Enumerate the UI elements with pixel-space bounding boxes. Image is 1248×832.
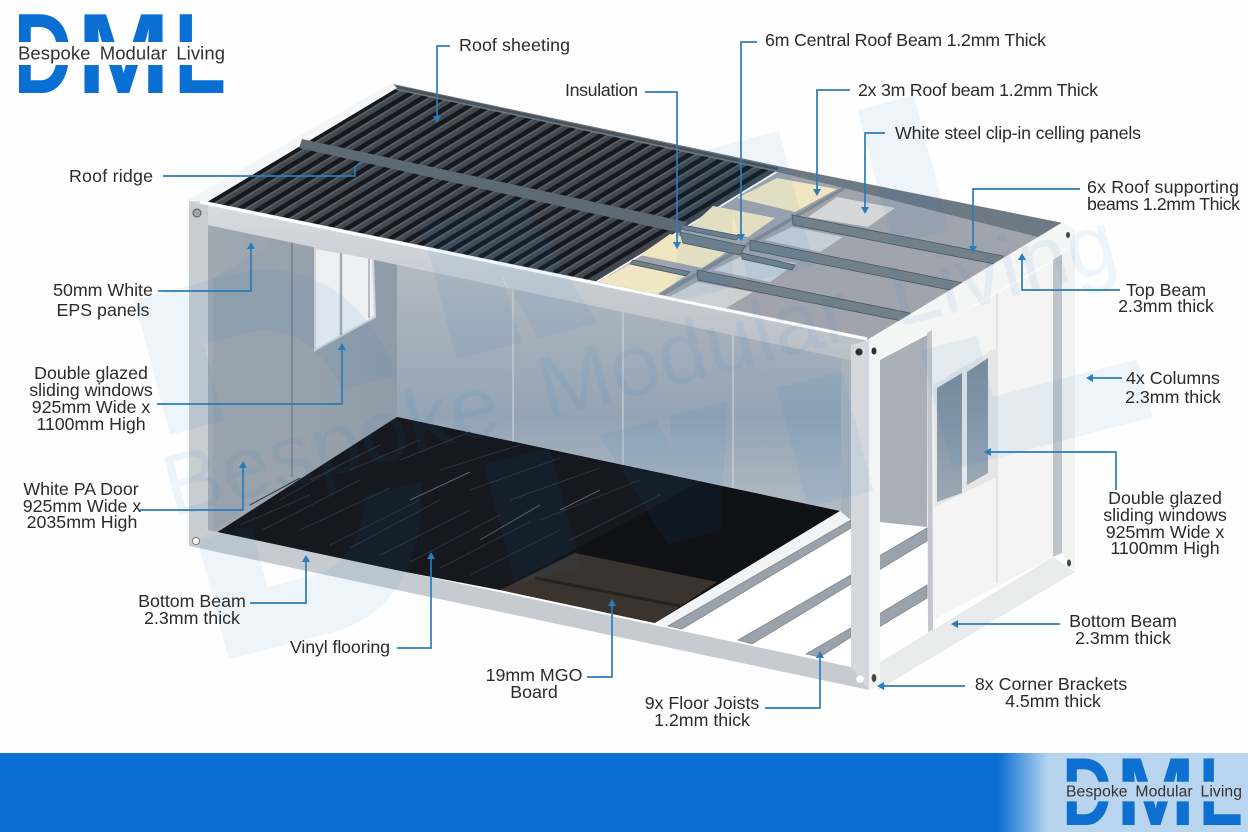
roof far edge dark line [396, 87, 778, 169]
callout: bottom beam left: Bottom Beam [138, 591, 246, 611]
callout: interior windows: 925mm Wide x [32, 397, 150, 417]
callout: right windows: Double glazed [1108, 488, 1222, 508]
callout: interior windows [29, 343, 346, 434]
right bottom beam [878, 557, 1075, 690]
callout: columns [1086, 368, 1221, 407]
callout: MGO board [486, 599, 616, 702]
interior window [315, 248, 375, 350]
callout: roof sheeting [433, 35, 570, 123]
callout: right windows: 925mm Wide x [1106, 522, 1224, 542]
callout: columns: 2.3mm thick [1125, 387, 1221, 407]
MGO board [500, 553, 717, 623]
callout: interior windows: Double glazed [34, 363, 148, 383]
callout: interior windows: sliding windows [29, 380, 153, 400]
logo: footer: Bespoke Modular Living [1066, 784, 1242, 801]
container illustration [188, 83, 1075, 690]
callout: roof supporting beams [969, 177, 1240, 253]
callout: EPS panels: 50mm White [53, 280, 153, 300]
front inner column shade [841, 358, 851, 520]
right rear column [1053, 249, 1062, 557]
front right white column [869, 340, 880, 690]
callout: right windows: 1100mm High [1110, 538, 1220, 558]
right side wall panels [932, 262, 1053, 620]
open floor area [655, 510, 880, 680]
callout: floor joists [645, 651, 824, 730]
callout: PA door [23, 461, 247, 532]
back wall [397, 263, 851, 520]
callout: bottom beam right [951, 611, 1177, 648]
front right column [851, 340, 869, 690]
front top beam highlight [200, 202, 867, 339]
watermark [134, 96, 1152, 660]
callout: EPS panels: EPS panels [57, 300, 150, 320]
callout: interior windows: 1100mm High [36, 414, 146, 434]
callout: roof ridge: Roof ridge [69, 166, 153, 186]
roof ridge [299, 139, 687, 233]
corner brackets [192, 209, 1071, 683]
cross beam strips [655, 187, 846, 298]
footer band [0, 753, 1248, 832]
watermark: M [357, 8, 937, 704]
callout: roof ridge [69, 162, 361, 186]
callout: top beam: 2.3mm thick [1118, 296, 1214, 316]
right wall seam [996, 293, 998, 583]
callout: top beam [1018, 253, 1214, 316]
callout: central roof beam: 6m Central Roof Beam 1.2mm Thick [765, 30, 1046, 50]
callout: insulation [565, 80, 681, 249]
callout: 3m roof beam: 2x 3m Roof beam 1.2mm Thick [858, 80, 1098, 100]
floor base [213, 417, 840, 623]
white ceiling panels [667, 197, 895, 310]
watermark: D [80, 122, 504, 777]
right wall grey strip [927, 330, 933, 632]
callout: 3m roof beam [813, 80, 1098, 196]
right side wall interior panel [880, 335, 927, 527]
callout: bottom beam left: 2.3mm thick [144, 608, 240, 628]
watermark: Bespoke Modular Living [152, 192, 1126, 536]
callout: vinyl flooring [290, 552, 435, 657]
callout: corner brackets [877, 674, 1127, 711]
left side wall [208, 225, 397, 540]
callout: right windows [984, 448, 1227, 558]
floor joists [668, 520, 927, 657]
bottom beam front face [189, 530, 869, 690]
callout: top beam: Top Beam [1126, 280, 1206, 300]
callout: PA door: White PA Door [23, 479, 139, 499]
roof near-left edge [188, 83, 397, 202]
callout: insulation: Insulation [565, 80, 638, 100]
open ceiling base [595, 172, 1063, 340]
callout: MGO board: 19mm MGO [486, 665, 582, 685]
callout: roof supporting beams: 6x Roof supporting [1087, 177, 1239, 197]
side wall panel seam [291, 241, 293, 477]
roof far edge [393, 84, 1063, 238]
logo: top left [18, 14, 224, 93]
roof beams [630, 215, 1003, 322]
callout: floor joists: 1.2mm thick [654, 710, 750, 730]
callout: roof sheeting: Roof sheeting [459, 35, 570, 55]
callout: bottom beam right: 2.3mm thick [1075, 628, 1171, 648]
right top beam [867, 222, 1075, 360]
callout: ceiling panels [861, 123, 1141, 214]
back wall panel seams [513, 288, 733, 494]
callout: vinyl flooring: Vinyl flooring [290, 637, 390, 657]
callout: MGO board: Board [510, 682, 558, 702]
callout: central roof beam [737, 30, 1046, 241]
callout: bottom beam left [138, 555, 310, 628]
callout: PA door: 925mm Wide x [23, 496, 141, 516]
callout: PA door: 2035mm High [27, 512, 137, 532]
callout: EPS panels [53, 242, 255, 320]
front top beam [189, 201, 867, 360]
front left column [189, 201, 208, 546]
callout: roof supporting beams: beams 1.2mm Thick [1087, 194, 1240, 214]
callout: columns: 4x Columns [1126, 368, 1220, 388]
side wall door panel [213, 240, 291, 530]
insulation panels [597, 178, 837, 296]
right side window [933, 347, 997, 507]
logo: footer [1066, 758, 1241, 825]
callout: floor joists: 9x Floor Joists [645, 693, 759, 713]
white floor edge strip [655, 511, 851, 628]
roof dark sheeting [207, 88, 778, 282]
logo: top left: Bespoke Modular Living [18, 42, 225, 64]
callout: ceiling panels: White steel clip-in celling panels [895, 123, 1141, 143]
callout: corner brackets: 4.5mm thick [1005, 691, 1101, 711]
callout: corner brackets: 8x Corner Brackets [975, 674, 1127, 694]
vinyl flooring [213, 417, 700, 590]
callout: bottom beam right: Bottom Beam [1069, 611, 1177, 631]
callout: right windows: sliding windows [1103, 505, 1227, 525]
